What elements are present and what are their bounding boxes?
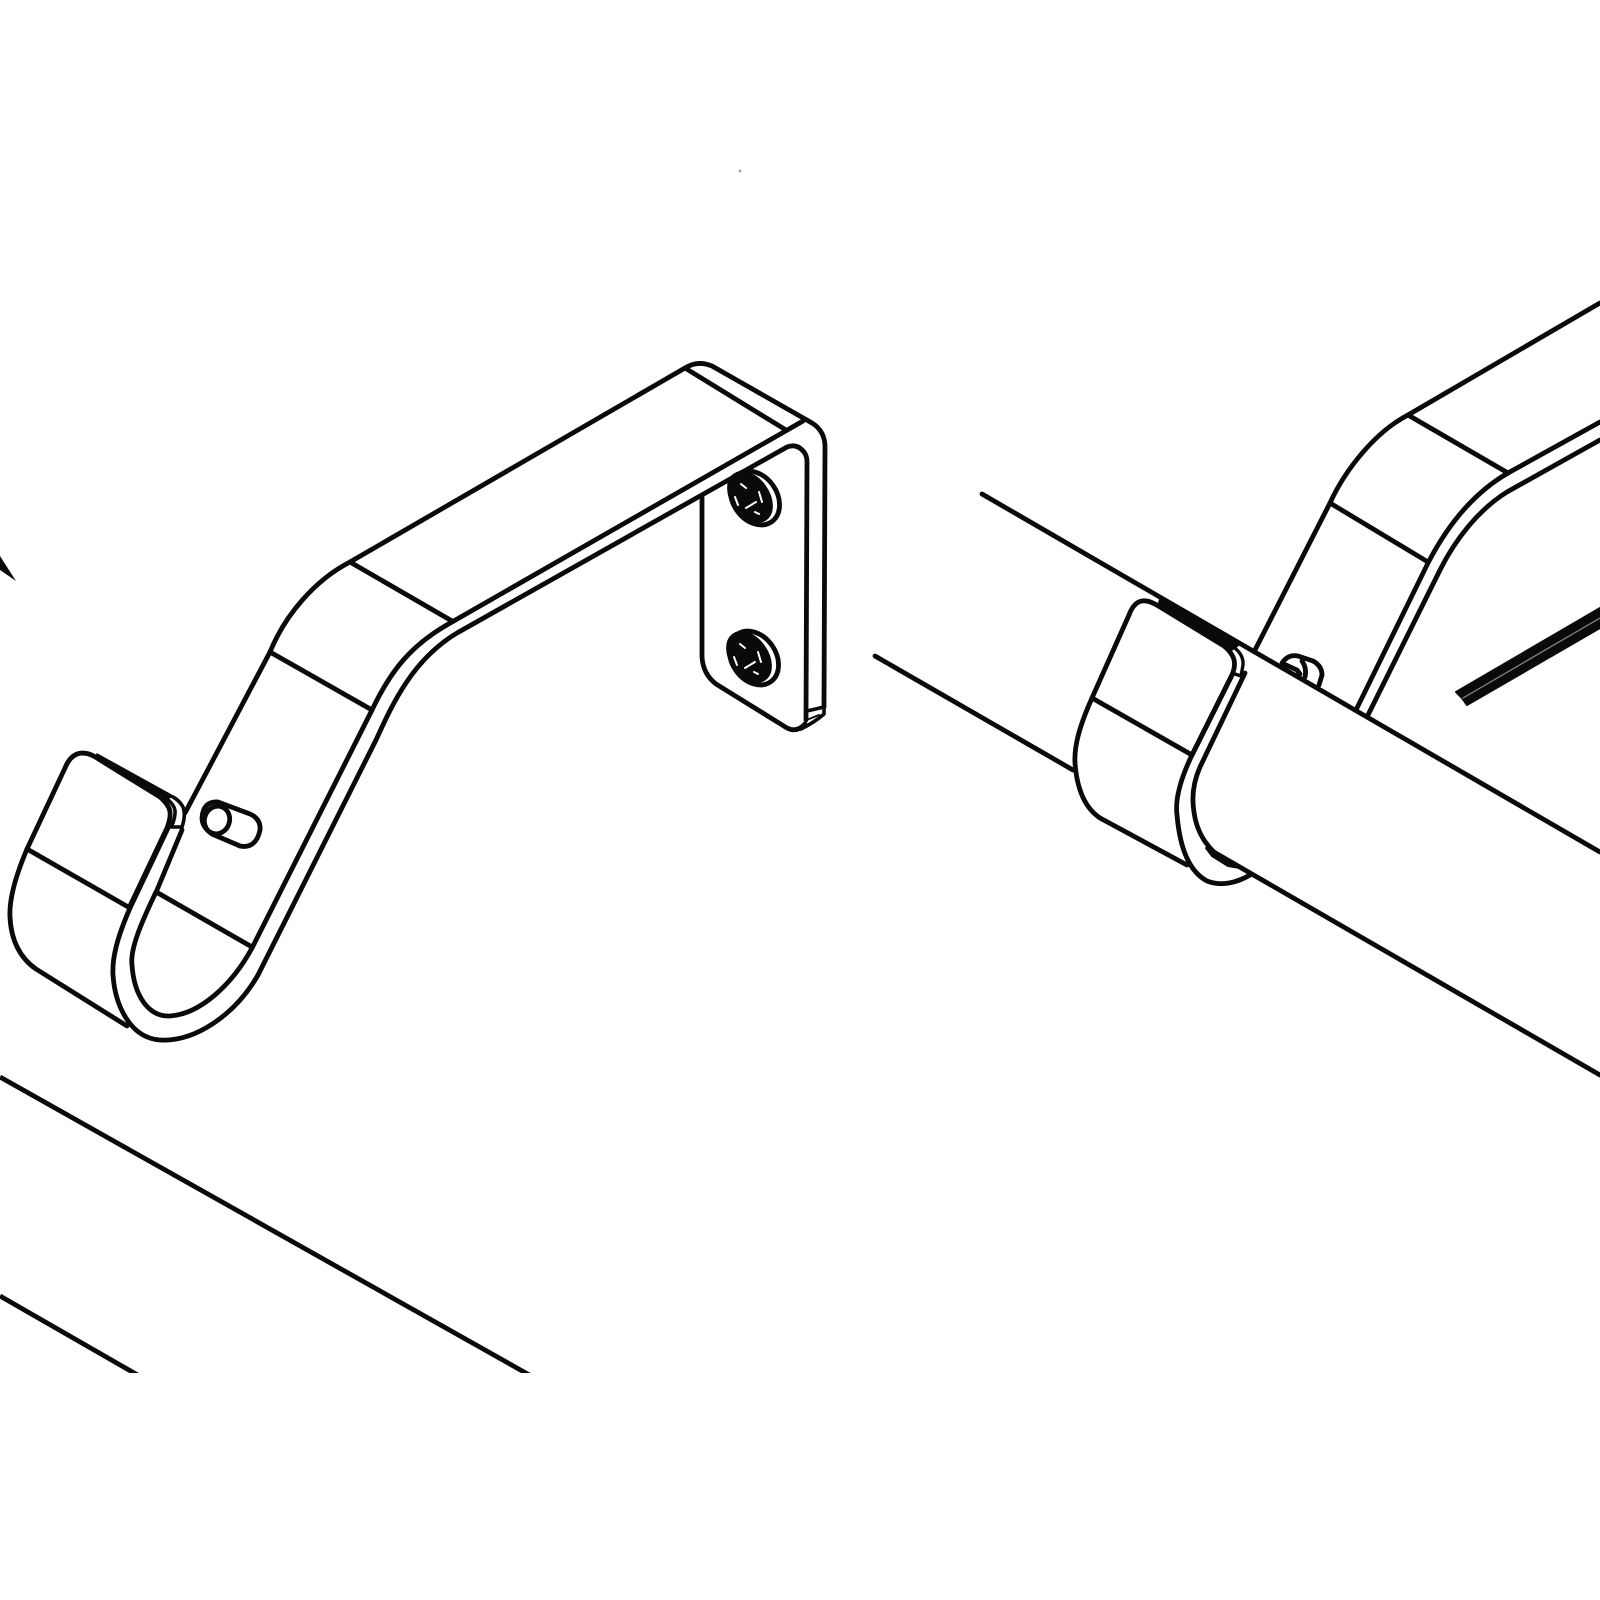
hook tab <box>1075 598 1243 865</box>
hook strip front <box>1177 673 1250 884</box>
left bracket <box>10 363 825 1040</box>
top fold line <box>685 368 786 430</box>
arrow tip fragment at left edge <box>0 556 16 581</box>
screw top <box>720 462 790 534</box>
bracket arm <box>1255 303 1600 650</box>
strip inner line <box>132 421 803 1016</box>
arm bend dividers <box>1330 415 1508 562</box>
bracket arm upper edge <box>185 363 825 813</box>
pin behind rod <box>1282 656 1322 685</box>
thick lines at right edge <box>1456 608 1600 705</box>
plate bottom end <box>801 707 824 729</box>
speck <box>739 170 741 172</box>
arm bend dividers <box>158 562 452 947</box>
slotted pin <box>200 802 260 846</box>
rod lower line, right segment <box>1212 851 1600 1075</box>
lower rod lines, cropped at bottom <box>0 1077 540 1381</box>
mounting plate <box>702 497 805 730</box>
screw bottom <box>719 622 789 694</box>
arm strip lines <box>1357 422 1600 715</box>
line drawing: two curtain rod brackets <box>0 170 1600 1373</box>
rod top line <box>982 494 1600 852</box>
rod lower line, left segment <box>875 656 1073 770</box>
right bracket with rod <box>875 303 1600 1075</box>
hook tab back face <box>10 753 184 1026</box>
strip outer line <box>113 446 807 1040</box>
